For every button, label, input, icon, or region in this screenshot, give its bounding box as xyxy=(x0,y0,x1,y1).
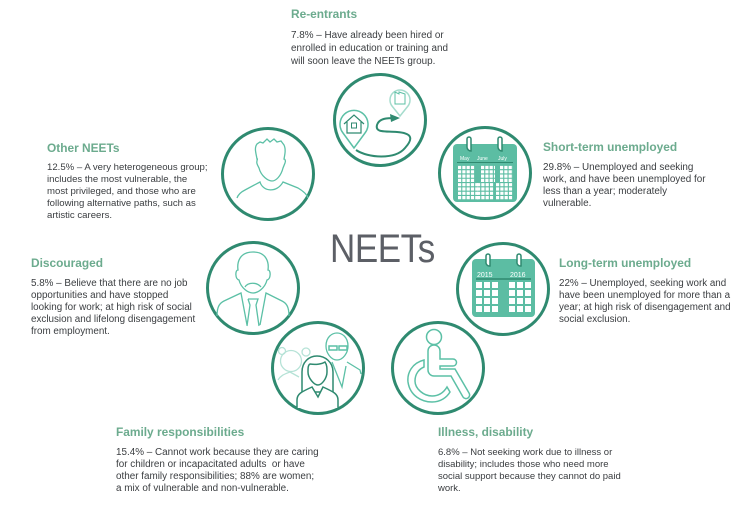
year labels: 2016 xyxy=(510,272,526,279)
text block: Short-term unemployed: vulnerable. xyxy=(543,198,591,209)
text block: Long-term unemployed: year; at high risk of disengagement and xyxy=(559,302,731,313)
text block: Illness, disability: work. xyxy=(438,483,461,494)
text block: Discouraged: exclusion and lifelong disengagement xyxy=(31,314,195,325)
child figure xyxy=(278,348,310,380)
text block: Short-term unemployed: Short-term unemployed xyxy=(543,140,677,154)
text block: Discouraged: looking for work; at high risk of social xyxy=(31,302,192,313)
icon: family group xyxy=(272,322,364,414)
month labels: July xyxy=(498,156,507,162)
text block: Family responsibilities xyxy=(116,425,319,494)
text block: Re-entrants: Re-entrants xyxy=(291,7,357,21)
text block: Discouraged: opportunities and have stopped xyxy=(31,290,168,301)
text block: Short-term unemployed: work, and have been unemployed for xyxy=(543,174,706,185)
text block: Discouraged: Discouraged xyxy=(31,256,103,270)
icon: discouraged man in suit xyxy=(208,242,298,334)
month labels: May xyxy=(460,156,470,162)
year labels: 2015 xyxy=(477,272,493,279)
text block: Discouraged: from employment. xyxy=(31,326,110,337)
text block: Family responsibilities: other family responsibilities; 88% are women; xyxy=(116,471,314,482)
text block: Long-term unemployed xyxy=(559,256,731,325)
text block: Long-term unemployed: Long-term unemployed xyxy=(559,256,691,270)
icon: other NEETs person xyxy=(222,128,314,220)
text block: Illness, disability: 6.8% – Not seeking work due to illness or xyxy=(438,447,612,458)
text block: Long-term unemployed: 22% – Unemployed, seeking work and xyxy=(559,278,726,289)
text block: Long-term unemployed: social exclusion. xyxy=(559,314,630,325)
text block: Other NEETs: includes the most vulnerable, the xyxy=(47,174,187,185)
text block: Other NEETs: most privileged, and those who are xyxy=(47,186,196,197)
icon: short-term calendar May June July xyxy=(440,128,530,218)
text block: Illness, disability: social support because they cannot do paid xyxy=(438,471,621,482)
text block: Re-entrants: 7.8% – Have already been hired or xyxy=(291,30,444,41)
year labels xyxy=(477,272,526,279)
icon: wheelchair user xyxy=(392,322,484,414)
icon: long-term calendar 2015 2016 xyxy=(458,244,548,334)
text block: Illness, disability: disability; includes those who need more xyxy=(438,459,609,470)
text block: Discouraged xyxy=(31,256,196,337)
text block: Family responsibilities: for children or incapacitated adults or have xyxy=(116,459,305,470)
text block: Family responsibilities: Family responsibilities xyxy=(116,425,244,439)
text block: Other NEETs: artistic careers. xyxy=(47,210,112,221)
text block: Short-term unemployed xyxy=(543,140,706,209)
text block: Short-term unemployed: 29.8% – Unemployed and seeking xyxy=(543,162,693,173)
text block: Long-term unemployed: have been unemployed for more than a xyxy=(559,290,730,301)
text block: Family responsibilities: 15.4% – Cannot work because they are caring xyxy=(116,447,319,458)
text block: Discouraged: 5.8% – Believe that there are no job xyxy=(31,278,188,289)
text block: Family responsibilities: a mix of vulnerable and non-vulnerable. xyxy=(116,483,289,494)
text block: Other NEETs xyxy=(47,141,208,221)
month labels: June xyxy=(477,156,488,162)
text block: Re-entrants: will soon leave the NEETs group. xyxy=(291,56,435,67)
text block: Re-entrants: enrolled in education or training and xyxy=(291,43,448,54)
text block: Other NEETs: Other NEETs xyxy=(47,141,119,155)
text block: Illness, disability xyxy=(438,425,621,494)
month labels xyxy=(460,156,507,162)
text block: Other NEETs: 12.5% – A very heterogeneous group; xyxy=(47,162,208,173)
text block: Re-entrants xyxy=(291,7,448,67)
title: NEETs: NEETs xyxy=(330,227,435,271)
icon: re-entrants path from home to office xyxy=(334,74,426,166)
text block: Illness, disability: Illness, disability xyxy=(438,425,533,439)
woman in foreground xyxy=(297,356,338,408)
text block: Short-term unemployed: less than a year; moderately xyxy=(543,186,667,197)
text block: Other NEETs: following alternative paths, such as xyxy=(47,198,196,209)
older man with glasses xyxy=(326,333,361,387)
